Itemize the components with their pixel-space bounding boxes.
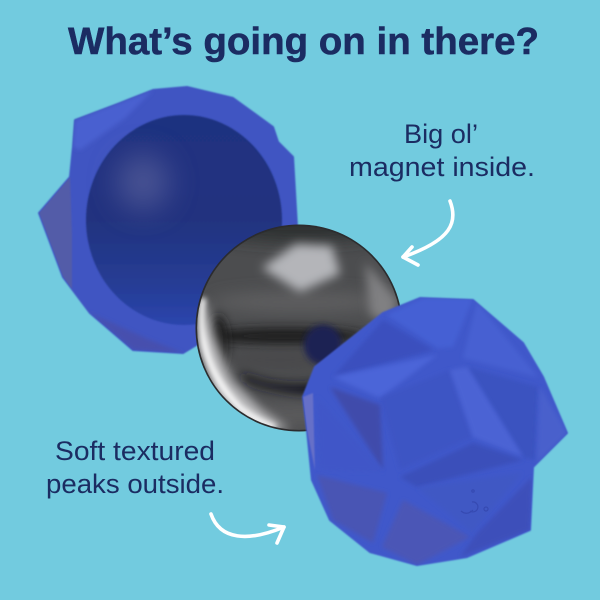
ball top shade — [242, 226, 356, 246]
callout: magnet: magnet inside. — [349, 152, 535, 182]
closed half of blue shell with peaks — [303, 298, 567, 565]
callout: peaks: peaks outside. — [46, 469, 224, 499]
title: What’s going on in there? — [68, 21, 539, 63]
ball upper mid light — [210, 292, 390, 312]
right facet — [538, 394, 564, 457]
embossed logo — [461, 490, 488, 513]
ball lower dark band — [238, 370, 309, 400]
lower facets — [317, 475, 387, 543]
ball dark band — [205, 328, 365, 344]
open half of blue shell — [39, 87, 297, 353]
ball mid gray band — [230, 352, 330, 368]
shell inner cavity — [86, 115, 282, 325]
left facets — [317, 397, 383, 472]
ball highlight — [262, 244, 340, 292]
shell silhouette — [303, 298, 567, 565]
shell rim — [39, 87, 297, 353]
callout: magnet: Big ol’ — [404, 119, 478, 149]
cavity highlight — [117, 154, 169, 210]
callout: magnet — [349, 119, 535, 182]
arrow: to peaks — [211, 514, 284, 543]
ball left dark — [208, 315, 228, 375]
ball soft crescent reflection — [198, 300, 290, 430]
ball bright edge — [202, 298, 275, 428]
central facets — [380, 370, 473, 470]
upper facets — [393, 300, 468, 346]
arrow: to magnet — [403, 201, 453, 265]
callout: peaks: Soft textured — [55, 436, 215, 466]
ball upper right sheen — [365, 262, 398, 325]
magnet ball — [196, 224, 400, 432]
callout: peaks — [46, 436, 224, 499]
ball bottom gray — [266, 398, 304, 425]
ball blue reflection — [304, 325, 342, 365]
